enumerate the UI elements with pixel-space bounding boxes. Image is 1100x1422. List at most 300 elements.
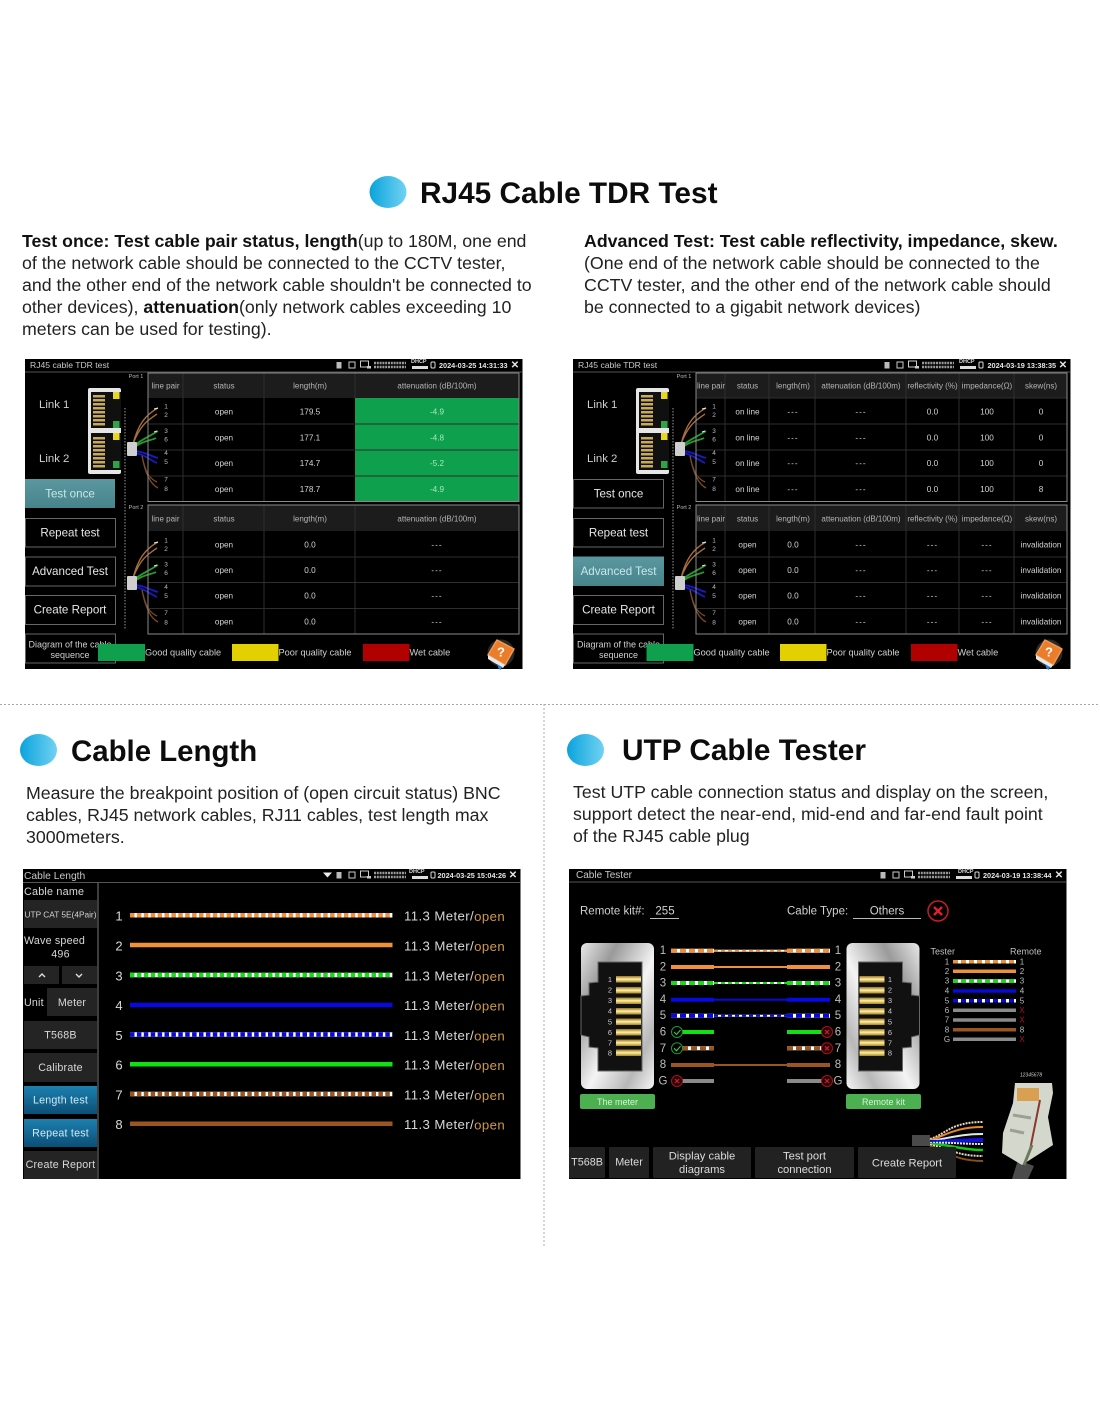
table: port 1: 0.0: [927, 459, 939, 468]
connector: the meter: The meter: [597, 1097, 638, 1107]
buttons: sequence: [599, 650, 638, 660]
sidebar: Unit: [24, 997, 44, 1009]
sidebar: Length test: [33, 1094, 88, 1106]
text block: UTP description: of the RJ45 cable plug: [573, 826, 750, 846]
table: port 2: ---: [981, 618, 993, 626]
table: port 1: line pair: [151, 382, 180, 390]
connector: remote kit: 3: [888, 996, 892, 1005]
bottom buttons: Meter: [615, 1156, 643, 1168]
table: port 1: status: [213, 382, 235, 390]
buttons: Create Report: [34, 604, 107, 616]
remote kit info: Cable Type:: [787, 906, 848, 918]
icon: help book: [488, 640, 514, 670]
port diagram: 6: [164, 436, 168, 444]
wire rows: 4: [115, 998, 123, 1013]
wire map: G: [834, 1076, 843, 1088]
wire map: 7: [835, 1043, 841, 1055]
table: port 1: reflectivity (%): [907, 382, 958, 390]
connector: the meter: 2: [608, 986, 612, 994]
table: port 1: open: [215, 459, 234, 468]
text block: advanced test: Advanced Test: Test cable reflectivity, impedance, skew.: [584, 231, 1058, 251]
legend: Good quality cable: [145, 648, 221, 658]
table: port 2: open: [215, 592, 234, 600]
wire legend: [930, 946, 1042, 1044]
port diagram: Link 2: [587, 453, 617, 465]
table: port 2: 0.0: [304, 592, 316, 600]
wire legend: X: [1019, 1006, 1025, 1015]
table: port 1: 0.0: [927, 434, 939, 442]
port diagram: 7: [164, 610, 168, 617]
buttons: Repeat test: [589, 526, 649, 540]
status bar: ✕: [511, 360, 519, 371]
table: port 1: 177.1: [300, 434, 321, 442]
status bar: 2024-03-19 13:38:35: [988, 361, 1056, 370]
port diagram: Port 2: [677, 505, 691, 511]
table: port 2: 0.0: [787, 540, 799, 550]
port diagram: 2: [712, 412, 716, 419]
text block: advanced test: CCTV tester, and the other end of the network cable should: [584, 275, 1051, 295]
table: port 1: ---: [855, 434, 867, 442]
connector: remote kit: 4: [888, 1006, 892, 1016]
buttons: Advanced Test: [581, 565, 657, 578]
wire map: 7: [660, 1043, 666, 1055]
icon: help book: ?: [1045, 644, 1053, 660]
table: port 1: length(m): [776, 382, 810, 390]
wire map: 5: [835, 1010, 841, 1022]
bottom buttons: T568B: [571, 1156, 603, 1168]
panel: cable tester screen: [569, 869, 1066, 1179]
panel: TDR advanced test screen: [573, 359, 1070, 670]
table: port 1: 0.0: [927, 485, 939, 494]
table: port 1: 0: [1039, 408, 1044, 416]
table: port 1: 100: [980, 408, 994, 416]
buttons: Create Report: [582, 604, 656, 616]
sidebar: Meter: [58, 997, 86, 1009]
panel: TDR test once screen: [25, 359, 522, 670]
wire legend: 1: [945, 958, 950, 966]
table: port 1: open: [215, 408, 234, 416]
wire legend: 6: [945, 1006, 950, 1015]
table: port 2: 0.0: [787, 592, 799, 600]
table: port 2: open: [215, 540, 234, 550]
wire legend: 2: [1020, 967, 1025, 976]
wire map: 8: [660, 1059, 666, 1071]
wire legend: G: [944, 1035, 950, 1044]
table: port 2: length(m): [293, 514, 327, 524]
wire legend: 2: [945, 967, 950, 976]
wire legend: 8: [1020, 1026, 1025, 1034]
table: port 2: open: [738, 566, 757, 575]
table: port 2: reflectivity (%): [907, 514, 958, 524]
table: port 1: line pair: [697, 382, 725, 390]
status bar: [569, 869, 1066, 882]
cable photo: RJ45 plug: [1002, 1072, 1053, 1179]
wire map: 4: [660, 994, 667, 1006]
wire map: 2: [660, 962, 666, 974]
sidebar: [24, 883, 98, 1179]
port diagram: 2: [712, 546, 716, 553]
wire legend: 5: [945, 996, 950, 1006]
buttons: Test once: [594, 488, 643, 500]
buttons: [573, 480, 664, 663]
port diagram: 4: [712, 450, 716, 457]
buttons: Advanced Test: [32, 565, 109, 578]
text block: test once: attenuation(only network cables exceeding 10: [143, 297, 511, 317]
table: port 1: status: [737, 382, 758, 390]
icon: heading dot: [567, 734, 604, 766]
table: port 2: ---: [855, 618, 867, 626]
table: port 2: 0.0: [304, 566, 316, 575]
legend: Poor quality cable: [278, 648, 352, 658]
table: port 1: 178.7: [300, 485, 321, 494]
table: port 1: -4.8: [430, 434, 445, 442]
port diagram: Port 1: [677, 374, 691, 380]
status bar: 2024-03-19 13:38:44: [983, 871, 1053, 880]
table: port 2: line pair: [697, 514, 725, 524]
bottom buttons: Create Report: [872, 1158, 943, 1170]
sidebar: Wave speed: [24, 935, 85, 947]
wire legend: Tester: [930, 946, 955, 956]
port diagram: Link 1: [39, 399, 69, 411]
heading: RJ45 Cable TDR Test: RJ45 Cable TDR Test: [420, 177, 718, 210]
wire rows: 5: [115, 1028, 123, 1043]
table: port 1: open: [215, 434, 234, 442]
cable photo: RJ45 plug: 12345678: [1020, 1072, 1042, 1078]
wire legend: X: [1019, 1016, 1025, 1024]
status bar: 2024-03-25 15:04:26: [438, 871, 506, 880]
port diagram: 3: [164, 562, 168, 568]
table: port 2: 0.0: [304, 540, 316, 550]
status bar: [573, 359, 1070, 372]
port diagram: 5: [164, 459, 168, 466]
table: port 1: on line: [735, 408, 760, 416]
status bar: DHCP: [409, 869, 425, 875]
connector: the meter: 7: [608, 1038, 612, 1048]
port diagram: [587, 374, 716, 630]
wire legend: 7: [945, 1016, 950, 1024]
wire rows: 2: [115, 938, 123, 954]
table: port 2: invalidation: [1021, 592, 1062, 600]
table: port 1: [148, 373, 519, 502]
wire map: 8: [835, 1059, 841, 1071]
table: port 2: ---: [855, 540, 867, 550]
table: port 2: attenuation (dB/100m): [397, 514, 477, 524]
section divider lines: [0, 704, 1100, 1246]
buttons: [25, 479, 116, 663]
port diagram: 8: [712, 620, 716, 626]
bottom buttons: diagrams: [679, 1164, 725, 1176]
sidebar: UTP CAT 5E(4Pair): [25, 910, 97, 920]
connector: the meter: 6: [608, 1028, 612, 1037]
wire map: 2: [835, 962, 841, 974]
connector: remote kit: 1: [888, 975, 892, 984]
remote kit info: 255: [655, 906, 675, 918]
table: port 2: invalidation: [1021, 540, 1062, 550]
port diagram: 6: [712, 570, 716, 577]
wire rows: 11.3 Meter/open: [404, 908, 505, 924]
table: port 2: open: [738, 592, 757, 600]
sidebar: Cable name: [24, 886, 84, 898]
port diagram: 1: [712, 404, 716, 410]
port diagram: Link 1: [587, 399, 617, 411]
table: port 2: 0.0: [787, 566, 799, 575]
table: port 1: 100: [980, 485, 994, 494]
wire rows: 11.3 Meter/open: [404, 938, 505, 954]
table: port 1: impedance(Ω): [962, 382, 1013, 390]
table: port 1: ---: [787, 434, 799, 442]
legend: Good quality cable: [694, 648, 770, 658]
port diagram: 6: [712, 436, 716, 444]
remote kit info: Remote kit#:: [580, 906, 645, 918]
table: port 1: attenuation (dB/100m): [821, 382, 901, 390]
port diagram: 8: [712, 486, 716, 493]
wire legend: 5: [1020, 996, 1025, 1006]
connector: the meter: 8: [608, 1048, 612, 1058]
wire map: 4: [835, 994, 842, 1006]
bottom buttons: connection: [777, 1164, 832, 1176]
port diagram: 7: [712, 610, 716, 617]
table: port 1: 100: [980, 459, 994, 468]
text block: cable length description: cables, RJ45 network cables, RJ11 cables, test length max: [26, 805, 489, 825]
connector: remote kit: 2: [888, 986, 892, 994]
wire rows: [115, 908, 505, 1132]
table: port 2: invalidation: [1021, 618, 1062, 626]
status bar: DHCP: [958, 869, 974, 875]
wire legend: 4: [1020, 986, 1025, 996]
status bar: [23, 869, 520, 882]
connector: remote kit: 8: [888, 1048, 892, 1058]
text block: test once: meters can be used for testing).: [22, 319, 272, 339]
heading: Cable Length: Cable Length: [71, 735, 257, 768]
table: port 2: ---: [431, 540, 443, 550]
wire map: 1: [660, 945, 666, 957]
table: port 1: ---: [787, 408, 799, 416]
wire legend: 1: [1020, 958, 1025, 966]
status bar: RJ45 cable TDR test: [30, 360, 110, 370]
table: port 1: skew(ns): [1025, 382, 1057, 390]
table: port 1: ---: [855, 459, 867, 468]
table: port 2: ---: [431, 566, 443, 575]
buttons: Diagram of the cable: [28, 640, 112, 650]
remote kit info: Others: [870, 906, 905, 918]
wire rows: 8: [115, 1117, 123, 1132]
table: port 1: ---: [855, 485, 867, 494]
port diagram: Port 2: [129, 505, 143, 511]
wire rows: 11.3 Meter/open: [404, 968, 505, 984]
table: port 2: ---: [431, 618, 443, 626]
port diagram: 5: [164, 593, 168, 600]
table: port 2: ---: [927, 592, 938, 600]
legend: [646, 644, 998, 661]
table: port 1: -5.2: [430, 459, 445, 468]
wire rows: 11.3 Meter/open: [404, 1088, 505, 1102]
table: port 2: open: [738, 618, 757, 626]
wire legend: Remote: [1010, 946, 1042, 956]
wire map: 3: [835, 978, 841, 990]
table: port 2: [696, 505, 1067, 634]
port diagram: 1: [164, 404, 168, 410]
table: port 1: 100: [980, 434, 994, 442]
table: port 2: ---: [431, 592, 443, 600]
port diagram: 4: [164, 584, 168, 591]
port diagram: 3: [712, 428, 716, 435]
buttons: sequence: [50, 650, 90, 660]
port diagram: 2: [164, 412, 168, 419]
port diagram: 8: [164, 486, 168, 493]
table: port 2: ---: [855, 566, 867, 575]
text block: test once: of the network cable should be connected to the CCTV tester,: [22, 253, 505, 273]
status bar: [25, 359, 522, 372]
table: port 2: line pair: [151, 514, 180, 524]
sidebar: T568B: [44, 1030, 77, 1042]
table: port 1: on line: [735, 485, 760, 494]
legend: Poor quality cable: [826, 648, 900, 658]
table: port 2: status: [213, 514, 235, 524]
status bar: DHCP: [959, 359, 975, 365]
legend: [98, 644, 450, 661]
buttons: Test once: [45, 488, 95, 500]
port diagram: 5: [712, 459, 716, 466]
sidebar: 496: [51, 948, 70, 960]
port diagram: 7: [712, 476, 716, 484]
connector: remote kit: 5: [888, 1018, 892, 1026]
remote kit info: [580, 906, 921, 918]
wire legend: 8: [945, 1026, 950, 1034]
table: port 1: ---: [855, 408, 867, 416]
table: port 1: 0: [1039, 434, 1044, 442]
table: port 2: ---: [981, 540, 993, 550]
table: port 2: ---: [927, 618, 938, 626]
port diagram: 1: [712, 538, 716, 544]
port diagram: 6: [164, 570, 168, 577]
icon: help book: ?: [497, 644, 505, 660]
port diagram: Port 1: [129, 374, 143, 380]
text block: test once: other devices),: [22, 297, 143, 317]
wire map: 3: [660, 978, 666, 990]
text block: test once: and the other end of the network cable shouldn't be connected to: [22, 275, 532, 295]
wire rows: 7: [115, 1088, 123, 1102]
wire map: 6: [660, 1026, 666, 1038]
table: port 1: attenuation (dB/100m): [397, 382, 477, 390]
table: port 2: ---: [927, 566, 938, 575]
icon: heading dot: [370, 176, 406, 208]
text block: cable length description: 3000meters.: [26, 827, 125, 847]
status bar: RJ45 cable TDR test: [578, 360, 658, 370]
wire rows: 11.3 Meter/open: [404, 1028, 505, 1043]
table: port 2: attenuation (dB/100m): [821, 514, 901, 524]
connector: the meter: 1: [608, 975, 612, 984]
legend: Wet cable: [958, 648, 998, 658]
table: port 1: ---: [787, 485, 799, 494]
table: port 1: open: [215, 485, 234, 494]
table: port 1: on line: [735, 459, 760, 468]
connector: the meter: 5: [608, 1018, 612, 1026]
status bar: ✕: [1055, 870, 1063, 881]
port diagram: 2: [164, 546, 168, 553]
text block: cable length description: Measure the breakpoint position of (open circuit status) BNC: [26, 783, 501, 803]
status bar: Cable Tester: [576, 870, 633, 881]
connector: the meter: 4: [608, 1006, 612, 1016]
port diagram: 1: [164, 538, 168, 544]
connector: remote kit: Remote kit: [862, 1097, 906, 1107]
table: port 1: [696, 373, 1067, 502]
panel: cable length screen: [23, 869, 520, 1179]
connector: the meter: [580, 943, 655, 1109]
text block: test once: (up to 180M, one end: [358, 231, 526, 251]
table: port 2: open: [738, 540, 757, 550]
table: port 2: impedance(Ω): [962, 514, 1013, 524]
status bar: 2024-03-25 14:31:33: [439, 361, 508, 370]
table: port 2: 0.0: [787, 618, 799, 626]
cable photo: stripped wires: [912, 1122, 983, 1161]
buttons: Repeat test: [40, 526, 100, 540]
sidebar: Calibrate: [38, 1062, 83, 1074]
connector: the meter: 3: [608, 996, 612, 1005]
wire map: 5: [660, 1010, 666, 1022]
wire map: 1: [835, 945, 841, 957]
port diagram: 5: [712, 593, 716, 600]
table: port 2: length(m): [776, 514, 810, 524]
bottom buttons: [569, 1147, 956, 1178]
bottom buttons: Test port: [783, 1150, 827, 1162]
wire legend: 3: [1020, 976, 1025, 986]
wire rows: 11.3 Meter/open: [404, 1117, 505, 1132]
wire rows: 1: [115, 908, 123, 924]
wire map: 6: [835, 1026, 841, 1038]
table: port 1: 179.5: [300, 408, 321, 416]
table: port 2: open: [215, 618, 234, 626]
table: port 1: 174.7: [300, 459, 321, 468]
table: port 2: open: [215, 566, 234, 575]
legend: Wet cable: [410, 648, 450, 658]
port diagram: 7: [164, 476, 168, 484]
sidebar: Repeat test: [32, 1128, 89, 1140]
wire rows: 3: [115, 968, 123, 984]
table: port 2: ---: [855, 592, 867, 600]
table: port 2: [148, 505, 519, 634]
port diagram: 4: [712, 584, 716, 591]
connector: remote kit: 7: [888, 1038, 892, 1048]
connector: remote kit: [846, 943, 921, 1109]
text block: UTP description: Test UTP cable connection status and display on the screen,: [573, 782, 1048, 802]
wire map: G: [659, 1076, 668, 1088]
table: port 2: invalidation: [1021, 566, 1062, 575]
port diagram: 4: [164, 450, 168, 457]
table: port 2: status: [737, 514, 758, 524]
table: port 1: -4.9: [430, 485, 445, 494]
table: port 1: 8: [1039, 485, 1044, 494]
status bar: DHCP: [411, 359, 427, 365]
icon: heading dot: [20, 734, 57, 766]
table: port 2: 0.0: [304, 618, 316, 626]
text block: advanced test: be connected to a gigabit network devices): [584, 297, 920, 317]
status bar: ✕: [1059, 360, 1067, 371]
heading: UTP Cable Tester: UTP Cable Tester: [622, 734, 866, 767]
status bar: Cable Length: [24, 871, 86, 882]
port diagram: 3: [164, 428, 168, 435]
table: port 1: length(m): [293, 382, 327, 390]
port diagram: Link 2: [39, 453, 69, 465]
table: port 2: ---: [927, 540, 938, 550]
port diagram: 3: [712, 562, 716, 568]
sidebar: Create Report: [26, 1159, 95, 1171]
wire legend: X: [1019, 1035, 1025, 1044]
table: port 1: 0.0: [927, 408, 939, 416]
text block: UTP description: support detect the near-end, mid-end and far-end fault point: [573, 804, 1043, 824]
table: port 1: 0: [1039, 459, 1044, 468]
icon: red error: [928, 901, 948, 921]
table: port 2: ---: [981, 592, 993, 600]
